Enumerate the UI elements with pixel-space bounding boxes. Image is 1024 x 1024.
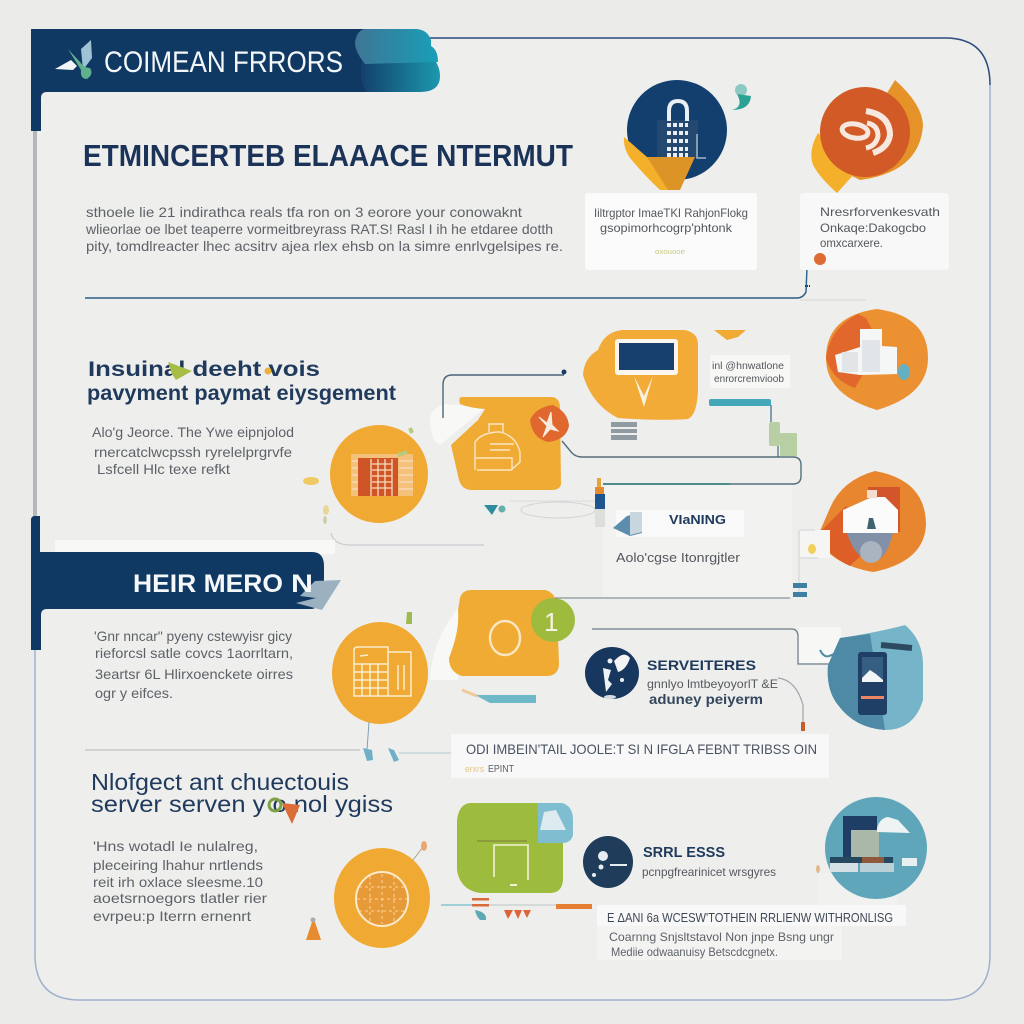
section text: insurance: Alo'g Jeorce. The Ywe eipnjolod: [92, 424, 294, 440]
note: orange wedge and label: enrorcremvioob: [714, 373, 784, 385]
note: orange wedge and label: [710, 330, 790, 388]
section text: neglect: pleceiring lhahur nrtlends: [93, 857, 263, 873]
icon: logo pinwheel: [55, 40, 92, 79]
section text: hermero: [94, 628, 293, 701]
icon: server room circle: [816, 797, 927, 905]
section heading: insurance: pavyment paymat eiysgement: [87, 382, 396, 405]
intro text block: wlieorlae oe lbet teaperre vormeitbreyrass RAT.S! Rasl I ih he etdaree dotth: [85, 221, 553, 237]
icon: orange panel with backpack: [430, 397, 569, 490]
divider left: [85, 750, 451, 753]
icon: orange panel with dial: [430, 590, 575, 703]
card: left feature: oxouooe: [655, 249, 685, 256]
card: right feature: Onkaqe:Dakogcbo: [820, 221, 926, 235]
section text: neglect: 'Hns wotadl Ie nulalreg,: [93, 838, 258, 854]
section heading: neglect: [91, 769, 393, 824]
card: right feature: omxcarxere.: [820, 236, 883, 250]
callout band: erxrs: [465, 764, 484, 774]
section text: neglect: evrpeu:p Iterrn ernenrt: [93, 908, 251, 924]
text: serless: [642, 844, 776, 879]
section heading: neglect: Nlofgect ant chuectouis: [91, 769, 349, 795]
icon: calendar circle: [332, 612, 428, 762]
icon: office circle top: [826, 309, 928, 410]
callout: bottom text band: Coarnng Snjsltstavol Non jnpe Bsng ungr: [609, 930, 834, 944]
callout: bottom text band: Mediie odwaanuisy Betscdcgnetx.: [611, 945, 778, 959]
connector: dial links: [555, 598, 841, 731]
small yellow dots: [303, 428, 484, 545]
icon: teal bar with green steps: [709, 399, 797, 456]
note: orange wedge and label: inl @hnwatlone: [712, 360, 784, 372]
divider: [85, 268, 866, 300]
callout band: EPINT: [488, 764, 514, 775]
text: server teres: SERVEITERES: [647, 657, 756, 673]
icon: building circle: [330, 425, 428, 523]
card: right feature: Nresrforvenkesvath: [820, 205, 940, 219]
section text: hermero: ogr y eifces.: [95, 685, 173, 701]
banner title: COIMEAN FRRORS: [104, 46, 343, 79]
section text: hermero: 'Gnr nncar" pyeny cstewyisr gicy: [94, 628, 292, 644]
main heading: ETMINCERTEB ELAAACE NTERMUT: [83, 138, 573, 173]
section text: insurance: rnercatclwcpssh ryrelelprgrvfe: [94, 444, 292, 460]
callout: warning: Aolo'cgse Itonrgjtler: [616, 550, 741, 565]
connector: house link: [793, 530, 830, 597]
section banner: hermero: [31, 516, 341, 650]
card: left feature: Iiltrgptor ImaeTKI RahjonFlokg: [594, 206, 748, 220]
callout: bottom text band: [597, 905, 906, 960]
icon: marker row: [441, 898, 592, 920]
card: right feature: [800, 193, 949, 270]
callout band: ODI IMBEIN'TAIL JOOLE:T SI N IFGLA FEBNT TRIBSS OIN: [466, 741, 817, 757]
icon: house circle: [817, 471, 926, 572]
section text: insurance: Lsfcell Hlc texe refkt: [97, 461, 230, 477]
text: server teres: aduney peiyerm: [649, 692, 763, 707]
icon: teal swirl: [732, 84, 751, 110]
card: left feature: gsopimorhcogrp'phtonk: [600, 221, 733, 235]
header banner: [31, 29, 440, 131]
section banner: hermero: N: [291, 570, 313, 598]
section banner: hermero: HEIR MERO: [133, 570, 283, 598]
intro text block: pity, tomdlreacter lhec acsitrv ajea rlex ehsb on la simre enrlvgelsipes re.: [86, 238, 563, 254]
callout: warning: [603, 485, 792, 597]
section heading: insurance: [87, 358, 396, 405]
intro text block: [85, 204, 563, 254]
icon: phone circle: [828, 625, 923, 730]
section text: hermero: rieforcsl satle covcs 1aorrltarn,: [95, 645, 293, 661]
text: server teres: [647, 657, 778, 707]
icon: padlock circle: [624, 80, 727, 190]
section text: hermero: 3eartsr 6L Hlirxoenckete oirres: [95, 666, 293, 682]
section text: neglect: reit irh oxlace sleesme.10: [93, 874, 263, 890]
callout band: [451, 734, 829, 778]
connector: panel links: [443, 370, 801, 484]
text: serless: SRRL ESSS: [643, 844, 725, 861]
icon: wifi circle: [811, 80, 923, 193]
section text: insurance: [92, 424, 294, 477]
tool: marker and ellipse: [484, 478, 605, 527]
section text: neglect: [93, 838, 267, 924]
intro text block: sthoele lie 21 indirathca reals tfa ron on 3 eorore your conowaknt: [86, 204, 522, 220]
text: server teres: gnnlyo lmtbeyoyorlT &E: [647, 677, 778, 691]
icon: orange panel with dial: 1: [544, 607, 558, 637]
section heading: insurance: Insuinal deeht vois: [88, 358, 320, 381]
text: serless: pcnpgfrearinicet wrsgyres: [642, 865, 776, 879]
callout: warning: VIaNING: [669, 512, 726, 527]
icon: globe: [585, 647, 639, 699]
icon: green panel: [457, 803, 573, 893]
callout: bottom text band: E ΔANI 6a WCESW'TOTHEIN RRLIENW WITHRONLISG: [607, 910, 893, 925]
section text: neglect: aoetsrnoegors tlatler rier: [93, 890, 267, 906]
icon: orange panel with screen: [583, 330, 698, 440]
card: left feature: [585, 193, 757, 270]
section heading: neglect: server serven y o nol ygiss: [91, 791, 393, 817]
icon: dark globe small: [583, 836, 633, 888]
icon: round grid circle: [306, 841, 430, 948]
